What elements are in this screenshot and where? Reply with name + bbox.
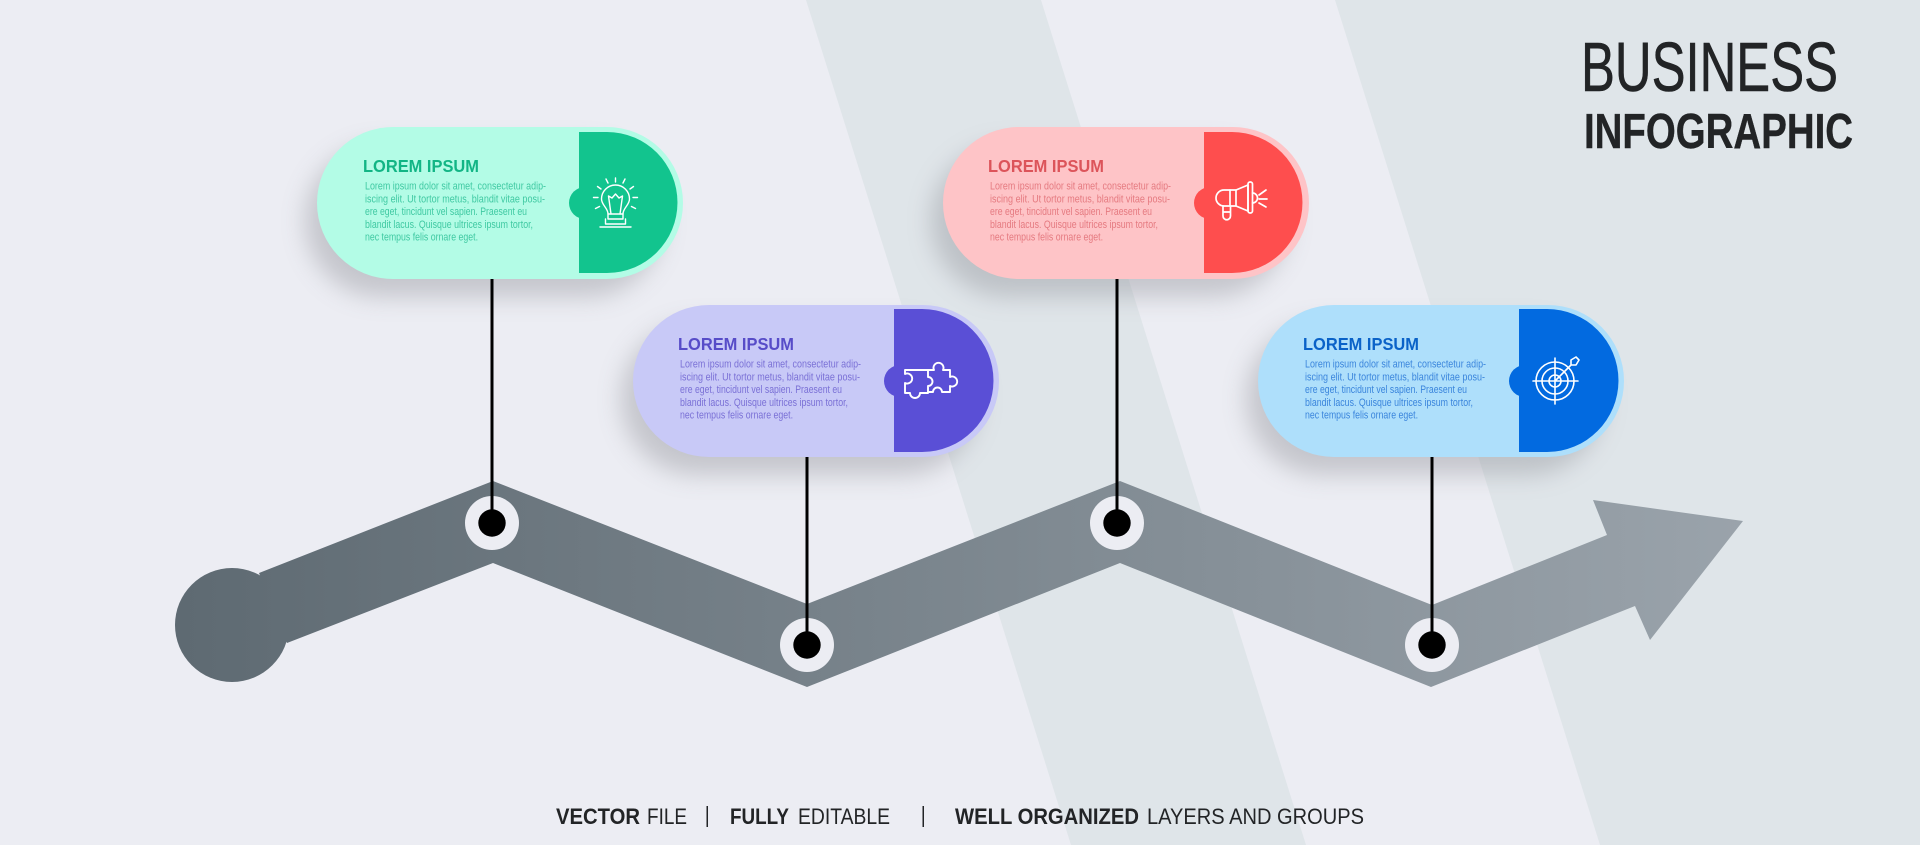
connector: purple card to node [806, 457, 808, 645]
title [1581, 28, 1853, 159]
footer text: FULLY [730, 804, 789, 829]
connector: blue card to node [1430, 457, 1434, 645]
zigzag timeline arrow [175, 481, 1743, 687]
text: purple card: ere eget, tincidunt vel sapien. Praesent eu [680, 384, 842, 396]
icon: puzzle pieces [905, 363, 957, 398]
icon: target with arrow [1533, 357, 1579, 404]
node 4 [1405, 612, 1459, 672]
text: red card: iscing elit. Ut tortor metus, blandit vitae posu- [990, 193, 1170, 205]
text: red card [990, 180, 1171, 244]
text: purple card: Lorem ipsum dolor sit amet, consectetur adip- [680, 358, 861, 370]
text: blue card [1305, 358, 1486, 422]
node 3 [1090, 490, 1144, 550]
panel: red card [931, 127, 1309, 297]
text: green card: iscing elit. Ut tortor metus, blandit vitae posu- [365, 193, 545, 205]
text: blue card: Lorem ipsum dolor sit amet, consectetur adip- [1305, 358, 1486, 370]
heading: purple card: LOREM IPSUM [678, 334, 794, 354]
text: purple card: blandit lacus. Quisque ultrices ipsum tortor, [680, 397, 848, 409]
icon: light bulb [594, 178, 638, 227]
text: red card: ere eget, tincidunt vel sapien. Praesent eu [990, 206, 1152, 218]
text: green card: blandit lacus. Quisque ultrices ipsum tortor, [365, 219, 533, 231]
text: blue card: iscing elit. Ut tortor metus, blandit vitae posu- [1305, 371, 1485, 383]
panel: purple card [621, 305, 999, 475]
text: purple card [680, 358, 861, 422]
heading: red card: LOREM IPSUM [988, 156, 1104, 176]
text: red card: nec tempus felis ornare eget. [990, 232, 1103, 244]
connector: green card to node [490, 279, 494, 523]
title: INFOGRAPHIC [1584, 105, 1853, 159]
text: green card: ere eget, tincidunt vel sapien. Praesent eu [365, 206, 527, 218]
text: green card: nec tempus felis ornare eget. [365, 232, 478, 244]
footer text: FILE [647, 804, 687, 829]
text: green card [365, 180, 546, 244]
panel: green card [305, 127, 683, 297]
heading: blue card: LOREM IPSUM [1303, 334, 1419, 354]
text: red card: blandit lacus. Quisque ultrices ipsum tortor, [990, 219, 1158, 231]
footer text: VECTOR [556, 804, 640, 829]
text: purple card: iscing elit. Ut tortor metus, blandit vitae posu- [680, 371, 860, 383]
panel: blue card [1246, 305, 1624, 475]
footer text: LAYERS AND GROUPS [1147, 804, 1364, 829]
footer text [556, 804, 1364, 829]
heading: green card: LOREM IPSUM [363, 156, 479, 176]
text: blue card: blandit lacus. Quisque ultrices ipsum tortor, [1305, 397, 1473, 409]
text: green card: Lorem ipsum dolor sit amet, consectetur adip- [365, 180, 546, 192]
connector: red card to node [1116, 279, 1118, 523]
footer text: EDITABLE [798, 804, 890, 829]
node 2 [780, 612, 834, 672]
footer text: WELL ORGANIZED [955, 804, 1139, 829]
text: red card: Lorem ipsum dolor sit amet, consectetur adip- [990, 180, 1171, 192]
text: blue card: ere eget, tincidunt vel sapien. Praesent eu [1305, 384, 1467, 396]
icon: megaphone [1216, 182, 1267, 220]
text: blue card: nec tempus felis ornare eget. [1305, 410, 1418, 422]
background band: left diagonal [806, 0, 1306, 845]
node 1 [465, 490, 519, 550]
background band: right diagonal [1335, 0, 1920, 845]
text: purple card: nec tempus felis ornare eget. [680, 410, 793, 422]
